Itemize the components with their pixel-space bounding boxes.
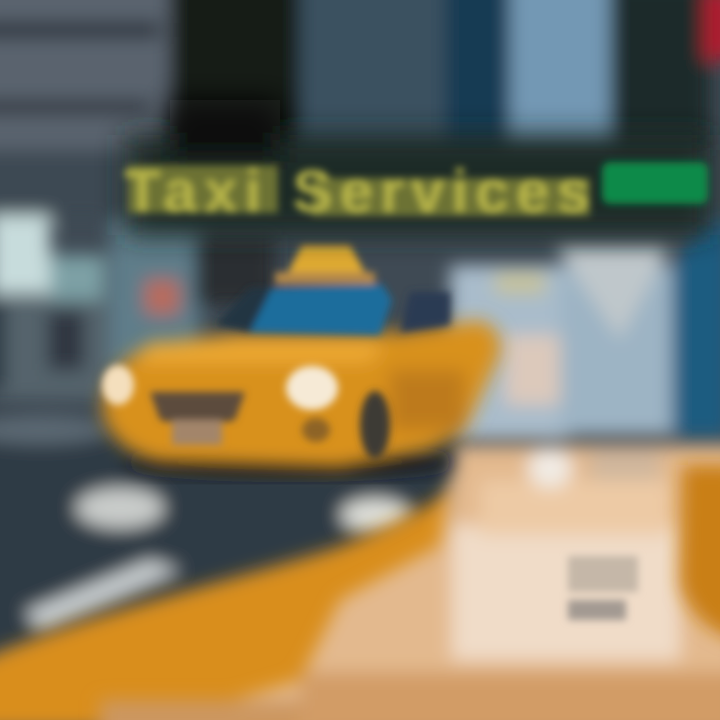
taxi shadow <box>125 448 455 476</box>
road <box>0 410 470 660</box>
title: Taxi Services <box>124 158 590 225</box>
paper receipt panel <box>100 445 720 720</box>
taxi grille <box>150 392 245 445</box>
taxi body <box>102 320 501 468</box>
taxi headlights <box>102 365 338 410</box>
orange foreground <box>0 485 470 720</box>
qr-like printed blocks <box>568 556 638 620</box>
right side buildings and panels <box>450 215 720 440</box>
taxi wheel and lower details <box>302 391 390 459</box>
heading: green label <box>602 162 708 204</box>
orange corner block <box>680 465 720 640</box>
taxi <box>102 245 501 476</box>
taxi roof and windshield <box>215 245 450 335</box>
dark band behind title <box>125 100 710 235</box>
